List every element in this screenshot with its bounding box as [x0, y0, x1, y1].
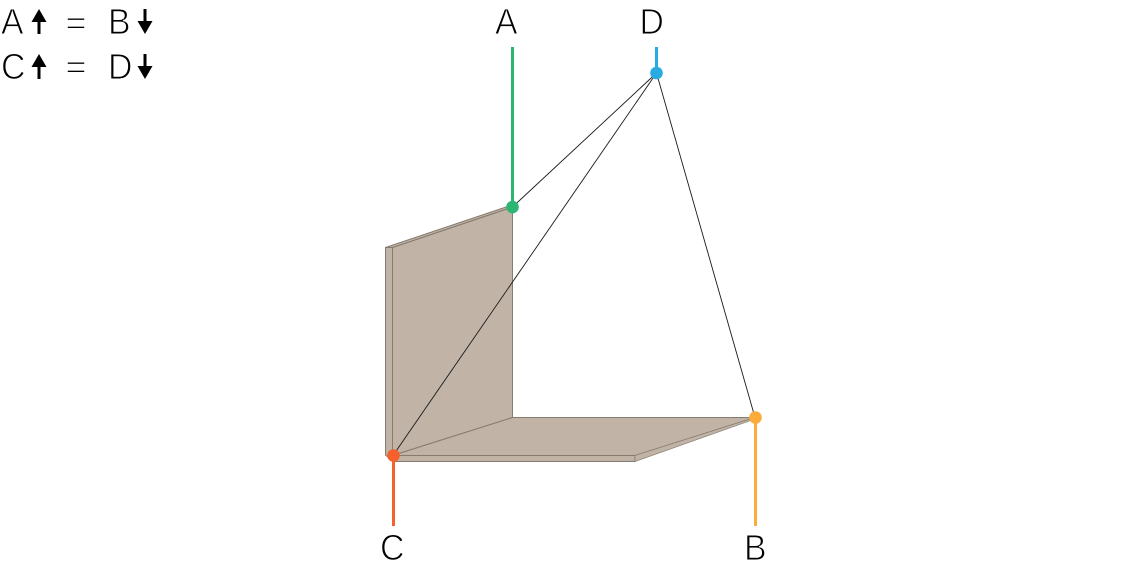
point B: orange line and dot: [749, 411, 762, 526]
legend row: A up equals B down: [1, 2, 152, 42]
point A: green line and dot: [506, 47, 519, 213]
label C: C: [380, 528, 404, 568]
point C: red-orange line and dot: [387, 449, 400, 526]
vertical plate face: [392, 207, 512, 456]
vertical plate edge: [386, 248, 392, 461]
label D: D: [640, 2, 664, 42]
horizontal plate face: [392, 418, 755, 456]
horizontal plate side edge: [635, 418, 755, 462]
legend row: A up equals B down: A: [1, 2, 24, 42]
legend row: C up equals D down: C: [1, 47, 25, 87]
horizontal plate front edge: [392, 456, 635, 462]
connecting lines: [393, 73, 755, 456]
legend row: C up equals D down: D: [108, 47, 132, 87]
label B: B: [744, 528, 767, 568]
label A: A: [495, 2, 518, 42]
legend row: A up equals B down: B: [108, 2, 131, 42]
legend row: A up equals B down: =: [66, 6, 87, 42]
legend row: C up equals D down: [1, 47, 152, 87]
L-shaped bracket: [386, 207, 755, 462]
vertical plate top edge: [386, 207, 512, 248]
point D: blue line and dot: [650, 47, 663, 79]
legend: relationships between rope ends: [1, 2, 152, 87]
legend row: C up equals D down: =: [66, 50, 87, 86]
